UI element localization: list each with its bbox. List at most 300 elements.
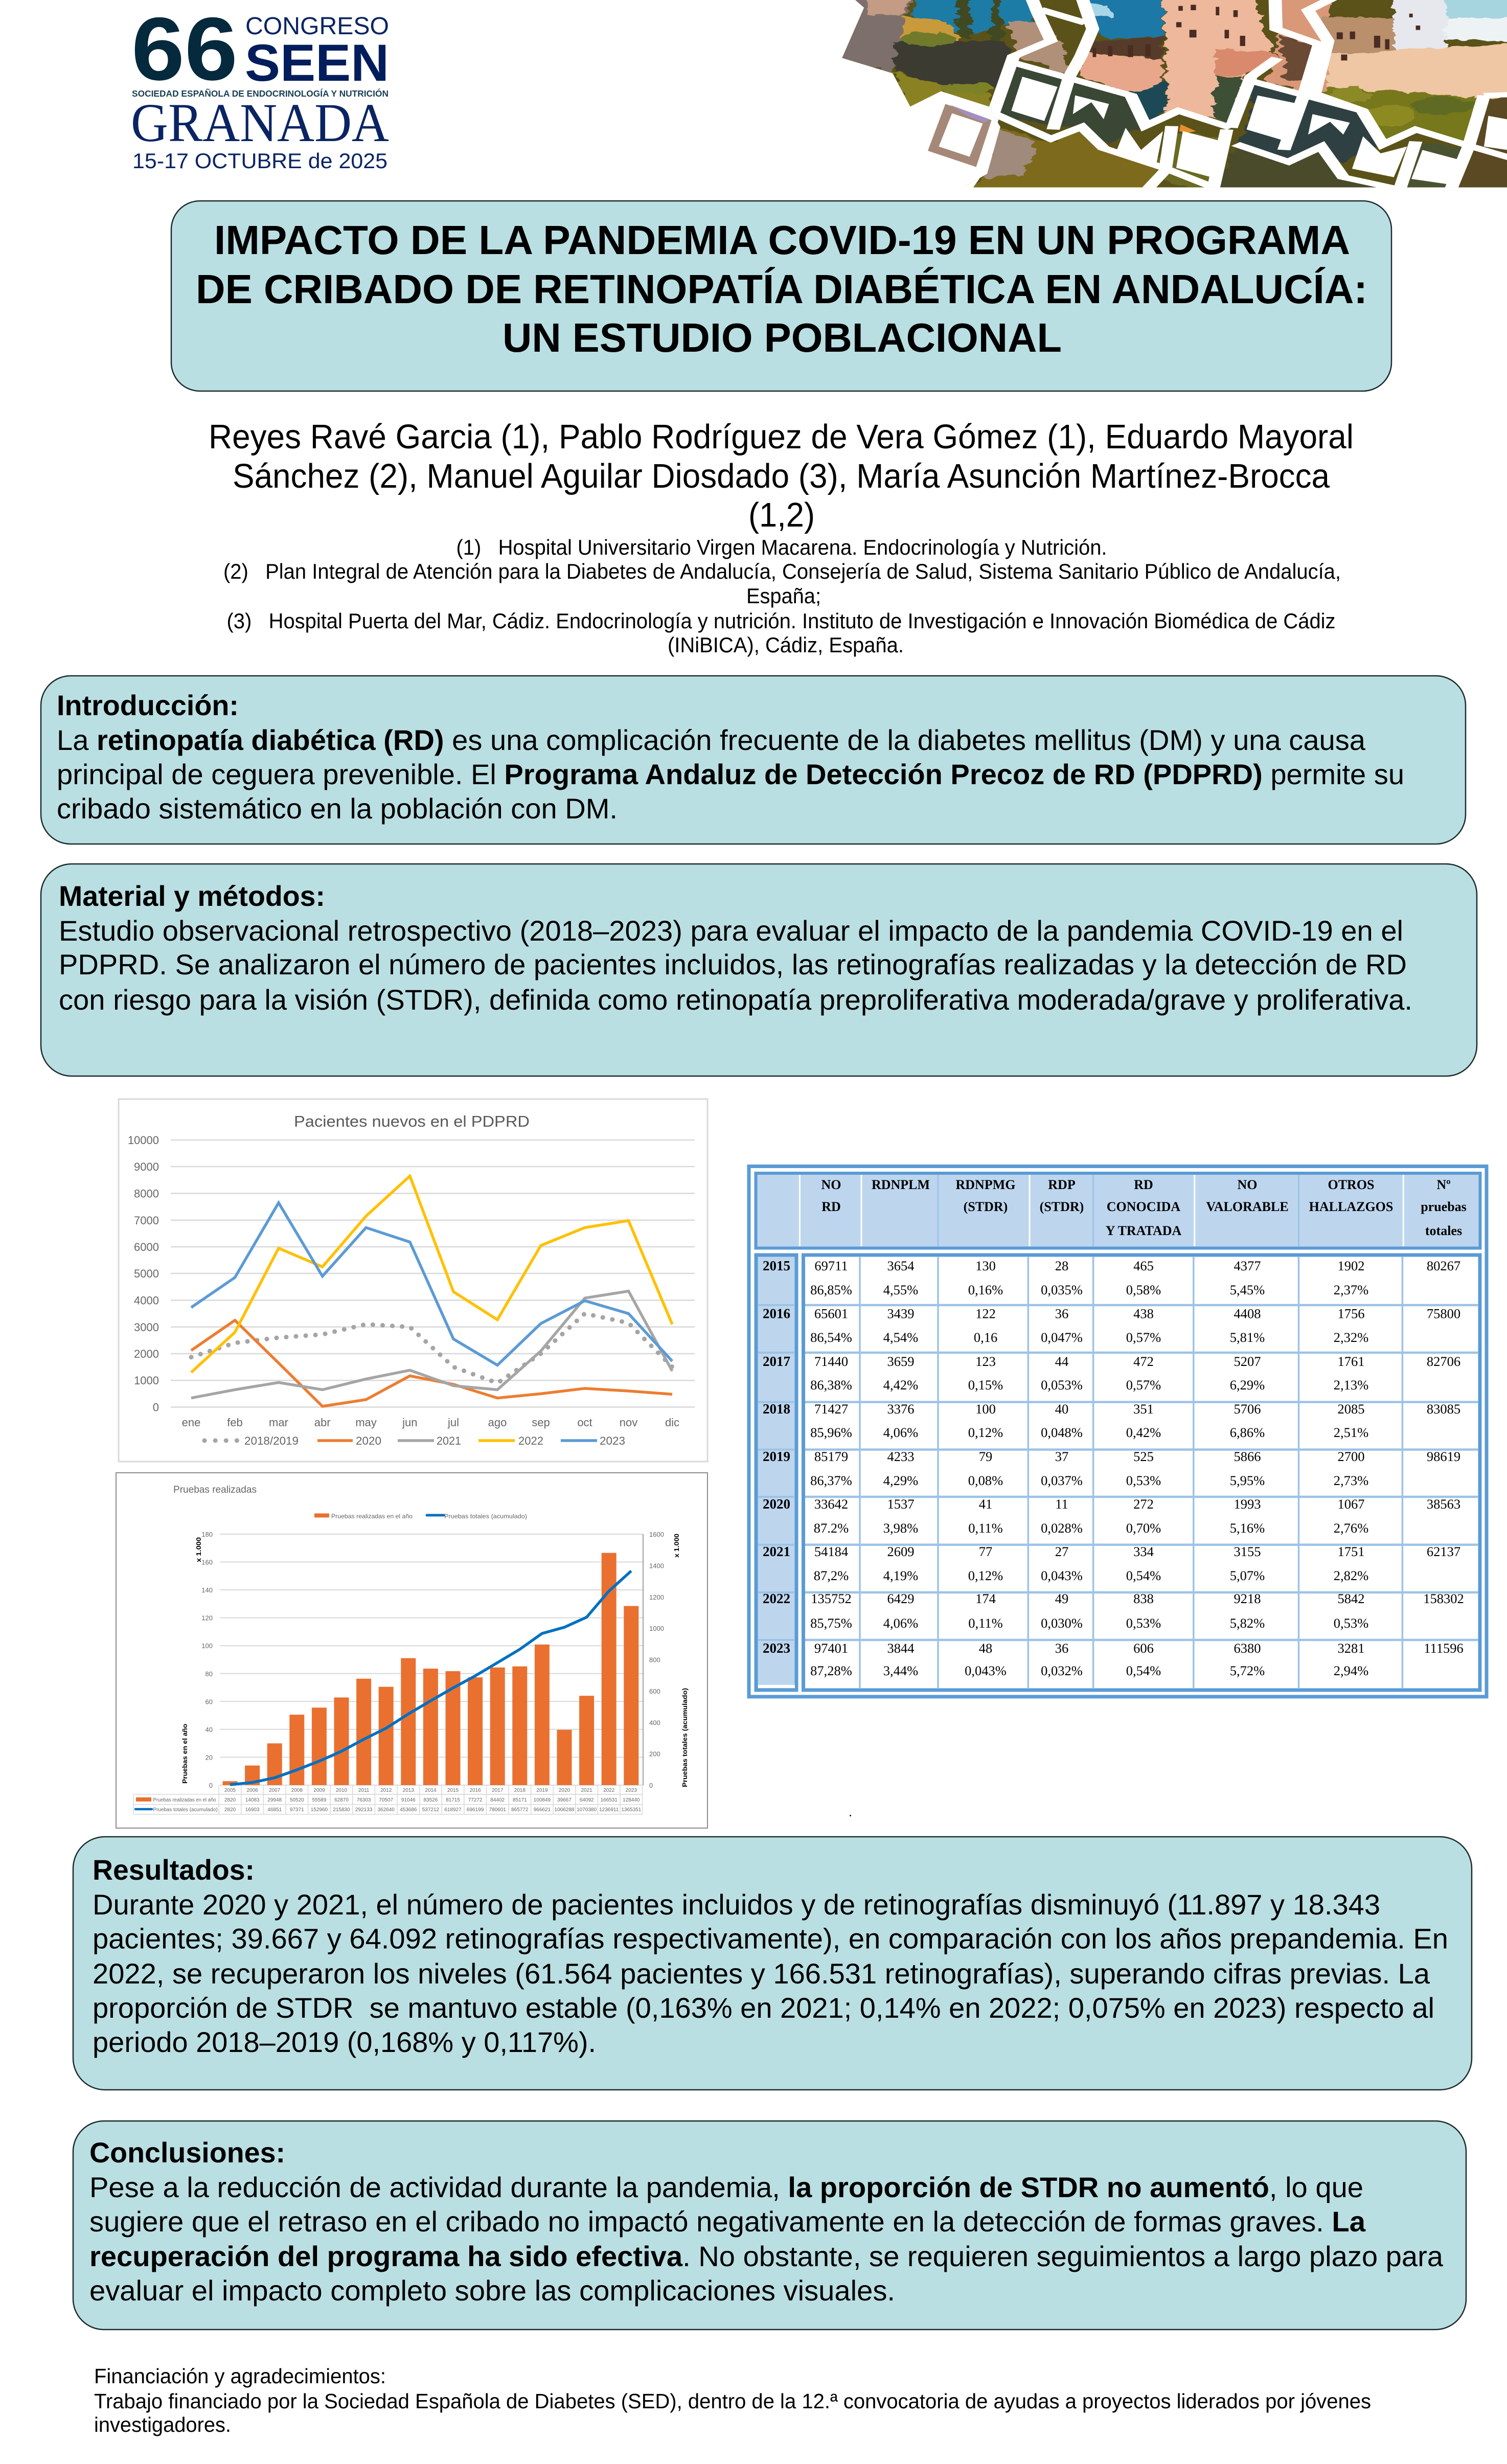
left axis labels: 60 [206,1698,213,1705]
right axis: 400 [649,1719,660,1726]
chart data table: 97371 [290,1807,304,1813]
row 2023: 2,94% [1334,1663,1368,1678]
row 2017: 71440 [814,1354,848,1369]
chart data table: 2020 [559,1788,570,1793]
table header: RDNPMG [956,1177,1015,1192]
table header: Nº [1436,1177,1451,1192]
row 2016: 65601 [814,1306,848,1321]
axis title: pruebas totales: Pruebas totales (acumulado) [681,1688,689,1787]
chart data table: 29948 [267,1797,282,1803]
row 2017: 4,42% [883,1377,918,1393]
chart data table: 865772 [511,1807,529,1813]
row 2023: 3,44% [883,1663,918,1678]
chart title: Pacientes nuevos en el PDPRD [294,1112,530,1130]
chart data table: 2014 [425,1788,437,1793]
x axis labels [182,1416,679,1429]
row 2019: 86,37% [810,1473,852,1488]
chart legend: Pruebas totales (acumulado) [444,1513,527,1520]
chart data table: 1070380 [577,1807,597,1813]
chart data table: 2007 [269,1788,281,1793]
x axis labels: ago [488,1416,507,1429]
row 2020: 38563 [1427,1496,1460,1512]
row 2021: 87,2% [814,1568,849,1583]
chart data table: 50520 [290,1797,304,1803]
table header: (STDR) [964,1199,1008,1214]
row 2022: 9218 [1234,1591,1261,1606]
row 2023: 6380 [1234,1640,1261,1656]
panel: title [171,201,1391,391]
table header: HALLAZGOS [1309,1199,1393,1214]
row 2015: 86,85% [810,1282,852,1297]
row 2017: 2,13% [1334,1377,1368,1393]
row 2017: 5207 [1234,1354,1261,1369]
row 2018: 4,06% [883,1425,918,1440]
row 2022: 158302 [1423,1591,1464,1606]
right axis: 0 [649,1782,653,1789]
text block: material y métodos body: PDPRD. Se analizaron el número de pacientes incluidos, las retinografías realizadas y la detección de RD [59,949,1407,980]
row 2021: 77 [979,1544,992,1559]
row 2018: 85,96% [810,1425,852,1440]
row 2019 [810,1449,1460,1488]
chart data table: 128440 [623,1797,640,1803]
chart data table: 2011 [358,1788,370,1793]
row 2016: 122 [975,1306,996,1321]
chart data table: 14083 [245,1797,260,1803]
row 2019: 4233 [887,1449,914,1464]
y axis labels: 3000 [134,1321,159,1334]
row 2018 [810,1401,1460,1440]
chart data table: 2017 [492,1788,504,1793]
series: 2018/2019 [191,1314,672,1383]
row 2017: 0,053% [1041,1377,1083,1393]
table: resultados del cribado por año [749,1167,1487,1697]
chart data table: 2005 [224,1788,236,1793]
table: year column: 2018 [763,1401,790,1417]
table header: pruebas [1421,1199,1467,1214]
table header: RDNPLM [872,1177,930,1192]
table header: CONOCIDA [1107,1199,1180,1214]
heading: introducción: Introducción: [57,690,239,721]
row 2018: 40 [1055,1401,1068,1417]
row 2018: 0,048% [1041,1425,1083,1440]
table: year column: 2019 [763,1449,790,1464]
chart data table: 83526 [423,1797,438,1803]
row 2019: 79 [979,1449,992,1464]
text block: resultados body: pacientes; 39.667 y 64.092 retinografías respectivamente), en comparación con los años prepandemia. En [93,1923,1448,1955]
heading: conclusiones: Conclusiones: [89,2137,285,2169]
x axis labels: may [355,1416,377,1429]
chart data table: 166531 [601,1797,618,1803]
row 2020: 2,76% [1334,1520,1368,1536]
chart data table [133,1785,643,1814]
row 2020: 0,70% [1126,1520,1161,1536]
row 2019: 85179 [814,1449,848,1464]
row 2017: 3659 [887,1354,914,1369]
cumulative line [230,1571,631,1785]
heading: poster title: DE CRIBADO DE RETINOPATÍA DIABÉTICA EN ANDALUCÍA: [196,266,1367,312]
panel: resultados [73,1837,1472,2090]
row 2019: 37 [1055,1449,1068,1464]
axis unit left: x 1.000 [195,1537,202,1562]
chart data table: 1365351 [621,1807,642,1813]
row 2020: 33642 [814,1496,848,1512]
row 2021: 0,54% [1126,1568,1161,1583]
row 2023 [810,1640,1464,1678]
table: year column: 2022 [763,1591,790,1606]
row 2016: 4,54% [883,1330,918,1345]
row 2020: 1537 [887,1496,914,1512]
chart data table: 64092 [580,1797,594,1803]
bars [223,1553,638,1785]
text block: authors: Sánchez (2), Manuel Aguilar Diosdado (3), María Asunción Martínez-Brocca [233,458,1330,495]
row 2018: 100 [975,1401,996,1417]
row 2017 [810,1354,1460,1393]
series: 2021 [191,1291,672,1398]
chart data table: 81715 [446,1797,460,1803]
row 2020: 0,028% [1041,1520,1083,1536]
text block: resultados body: periodo 2018–2019 (0,168% y 0,117%). [93,2026,596,2058]
row 2021: 27 [1055,1544,1068,1559]
row 2016: 0,16 [974,1330,997,1345]
heading: poster title [196,217,1367,360]
series: 2023 [191,1203,672,1365]
chart data table: 55589 [312,1797,327,1803]
row 2023: 111596 [1424,1640,1464,1656]
left axis labels: 20 [206,1753,213,1761]
chart legend [314,1513,527,1520]
row 2022: 5,82% [1230,1615,1265,1631]
chart data table: 2006 [246,1788,258,1793]
x axis labels: abr [314,1416,331,1429]
x axis labels: sep [532,1416,550,1429]
row 2017: 6,29% [1230,1377,1265,1393]
row 2021: 5,07% [1230,1568,1265,1583]
row 2018: 2085 [1337,1401,1365,1417]
row 2017: 82706 [1427,1354,1460,1369]
row 2019: 2700 [1337,1449,1365,1464]
chart data table: 2012 [380,1788,392,1793]
table header: (STDR) [1040,1199,1084,1214]
row 2019: 0,08% [968,1473,1003,1488]
x axis labels: nov [620,1416,637,1429]
y axis labels: 4000 [134,1294,159,1307]
row 2022: 6429 [887,1591,914,1606]
row 2015: 2,37% [1334,1282,1368,1297]
text block: material y métodos body: Estudio observacional retrospectivo (2018–2023) para evaluar el impacto de la pandemia COVID-19 en el [59,915,1403,947]
left axis labels: 180 [201,1531,213,1538]
row 2019: 4,29% [883,1473,918,1488]
chart data table: 215830 [333,1807,350,1813]
text block: introducción body [57,724,1404,825]
row 2021 [814,1544,1460,1583]
row 2021: 2609 [887,1544,914,1559]
row 2015: 0,035% [1041,1282,1083,1297]
row 2018: 83085 [1427,1401,1460,1417]
panel: conclusiones [73,2121,1466,2330]
row 2022: 174 [975,1591,996,1606]
heading: resultados: Resultados: [93,1854,255,1886]
row 2022: 0,11% [968,1615,1003,1631]
text block: affiliations: (3) Hospital Puerta del Mar, Cádiz. Endocrinología y nutrición. Instituto de Investigación e Innovación Biomédica de Cádiz [227,609,1335,633]
row 2015: 4377 [1234,1258,1261,1273]
text block: authors: (1,2) [748,496,815,534]
table header [756,1173,1480,1248]
table: year column: 2016 [763,1306,790,1321]
right axis: 800 [649,1656,660,1663]
row 2023: 5,72% [1230,1663,1265,1678]
row 2017: 44 [1055,1354,1068,1369]
row 2020: 272 [1133,1496,1154,1512]
row 2021: 1751 [1337,1544,1365,1559]
row 2023: 3281 [1337,1640,1365,1656]
y axis labels: 0 [153,1401,159,1414]
heading: poster title: UN ESTUDIO POBLACIONAL [503,315,1062,360]
right axis: 1000 [649,1625,664,1632]
table header: RDP [1048,1177,1076,1192]
row 2021: 0,12% [968,1568,1003,1583]
heading: material y métodos: Material y métodos: [59,880,325,912]
row 2022: 838 [1133,1591,1154,1606]
text block: financiación y agradecimientos: investigadores. [94,2413,231,2436]
row 2016: 3439 [887,1306,914,1321]
row 2022: 5842 [1337,1591,1365,1606]
chart data table: 39667 [557,1797,572,1803]
row 2023: 0,032% [1041,1663,1083,1678]
row 2017: 0,15% [968,1377,1003,1393]
chart data table: Pruebas totales (acumulado) [153,1807,218,1813]
row 2016 [810,1306,1460,1345]
table: year column: 2017 [763,1354,790,1369]
table: year column: 2021 [763,1544,790,1559]
left axis labels: 40 [206,1726,213,1733]
chart data table: 85171 [513,1797,527,1803]
right axis: 1400 [649,1562,664,1569]
row 2020: 5,16% [1230,1520,1265,1536]
chart data table: 362640 [378,1807,395,1813]
text block: conclusiones body: sugiere que el retraso en el cribado no impactó negativamente en la detección de formas graves. La [89,2206,1366,2238]
right axis: 1600 [649,1531,664,1538]
legend: 2023 [600,1434,625,1447]
row 2023: 3844 [887,1640,914,1656]
row 2015: 1902 [1337,1258,1365,1273]
text block: resultados body: Durante 2020 y 2021, el número de pacientes incluidos y de retinografías disminuyó (11.897 y 18.343 [93,1889,1380,1921]
row 2018: 6,86% [1230,1425,1265,1440]
text block: financiación y agradecimientos: Trabajo financiado por la Sociedad Española de Diabetes (SED), dentro de la 12.ª convocatoria de ayudas a proyectos liderados por jóvenes [94,2389,1371,2413]
legend: 2022 [518,1434,543,1447]
text block: introducción body: principal de ceguera prevenible. El Programa Andaluz de Detección Precoz de RD (PDPRD) permite su [57,759,1404,790]
row 2018: 0,42% [1126,1425,1161,1440]
chart data table: 152960 [311,1807,328,1813]
row 2018: 5706 [1234,1401,1261,1417]
row 2020: 0,11% [968,1520,1003,1536]
right axis: 600 [649,1687,660,1695]
row 2022: 0,53% [1126,1615,1161,1631]
text block: introducción body: cribado sistemático en la población con DM. [57,793,618,825]
row 2019: 0,037% [1041,1473,1083,1488]
table header: OTROS [1328,1177,1375,1192]
text block: material y métodos body [59,915,1412,1016]
row 2020: 11 [1055,1496,1068,1512]
left axis labels: 100 [201,1642,213,1650]
chart data table: 966621 [534,1807,551,1813]
row 2023: 606 [1133,1640,1154,1656]
panel: introducción [41,676,1466,844]
row 2018: 351 [1133,1401,1154,1417]
row 2019: 5866 [1234,1449,1261,1464]
chart data table: 62870 [334,1797,349,1803]
chart data table: 2820 [224,1797,236,1803]
row 2023: 36 [1055,1640,1068,1656]
text block: authors: Reyes Ravé Garcia (1), Pablo Rodríguez de Vera Gómez (1), Eduardo Mayoral [209,418,1354,456]
chart data table: 2019 [536,1788,548,1793]
legend: 2021 [437,1434,461,1447]
row 2016: 86,54% [810,1330,852,1345]
chart data table: 2009 [313,1788,325,1793]
text block: resultados body [93,1889,1448,2058]
chart data table: 2013 [403,1788,414,1793]
row 2022: 0,53% [1334,1615,1368,1631]
x axis labels: dic [665,1416,679,1429]
row 2019: 98619 [1427,1449,1460,1464]
chart data table: 2022 [603,1788,615,1793]
legend: 2018/2019 [244,1434,299,1447]
row 2016: 75800 [1427,1306,1460,1321]
table header: NO [821,1177,841,1192]
text block: conclusiones body: evaluar el impacto completo sobre las complicaciones visuales. [89,2275,895,2307]
y axis labels: 9000 [134,1160,159,1173]
text block: affiliations: (2) Plan Integral de Atención para la Diabetes de Andalucía, Consejería de Salud, Sistema Sanitario Público de Andalucía, [223,559,1341,583]
chart data table: 1006288 [555,1807,575,1813]
row 2018: 2,51% [1334,1425,1368,1440]
row 2023: 87,28% [810,1663,852,1678]
row 2017: 1761 [1337,1354,1365,1369]
table header: Y TRATADA [1106,1223,1181,1238]
row 2020: 41 [979,1496,992,1512]
chart data table: 618927 [444,1807,462,1813]
chart data table: 100849 [534,1797,551,1803]
text block: conclusiones body: recuperación del programa ha sido efectiva . No obstante, se requieren seguimientos a largo plazo para [89,2241,1443,2272]
row 2017: 123 [975,1354,996,1369]
x axis labels: ene [182,1416,200,1429]
text block: material y métodos body: con riesgo para la visión (STDR), definida como retinopatía preproliferativa moderada/grave y proliferativa. [59,984,1412,1016]
row 2018: 71427 [814,1401,848,1417]
row 2015: 130 [975,1258,996,1273]
x axis labels: mar [269,1416,288,1429]
row 2022: 135752 [811,1591,852,1606]
row 2019: 0,53% [1126,1473,1161,1488]
row 2021: 4,19% [883,1568,918,1583]
chart data table: 46851 [267,1807,282,1813]
row 2022: 4,06% [883,1615,918,1631]
panel: material y métodos [41,864,1477,1076]
chart data table: 70507 [379,1797,394,1803]
row 2021: 54184 [814,1544,848,1559]
text block: resultados body: 2022, se recuperaron los niveles (61.564 pacientes y 166.531 retinografías), superando cifras previas. La [93,1958,1430,1990]
row 2018: 3376 [887,1401,914,1417]
table: year column: 2020 [763,1496,790,1512]
row 2016: 1756 [1337,1306,1365,1321]
header image: Alhambra mosaic [818,0,1507,193]
row 2015: 69711 [814,1258,848,1273]
chart data table: 453686 [400,1807,417,1813]
logo: 66 Congreso SEEN Granada: 15-17 OCTUBRE de 2025 [132,149,387,173]
row 2017: 0,57% [1126,1377,1161,1393]
y axis labels: 10000 [128,1134,159,1147]
heading: poster title: IMPACTO DE LA PANDEMIA COVID-19 EN UN PROGRAMA [214,217,1350,263]
chart legend: Pruebas realizadas en el año [331,1513,413,1520]
left axis labels: 0 [209,1782,213,1789]
text block: affiliations: (1) Hospital Universitario Virgen Macarena. Endocrinología y Nutrición. [456,535,1107,559]
chart data table: 2023 [626,1788,637,1793]
row 2016: 5,81% [1230,1330,1265,1345]
y axis labels: 6000 [134,1241,159,1253]
left axis labels: 80 [206,1670,213,1678]
row 2019: 525 [1133,1449,1154,1464]
table header: VALORABLE [1206,1199,1289,1214]
row 2015: 5,45% [1230,1282,1265,1297]
text block: financiación y agradecimientos [94,2364,1371,2436]
chart data table: 292133 [355,1807,373,1813]
chart data table: 91046 [401,1797,416,1803]
text block: affiliations: (INiBICA), Cádiz, España. [668,633,904,657]
table header: NO [1237,1177,1258,1192]
row 2016: 0,047% [1041,1330,1083,1345]
x axis labels: feb [227,1416,243,1429]
row 2023: 0,043% [965,1663,1007,1678]
bar chart: Pruebas realizadas [116,1473,707,1828]
line chart: Pacientes nuevos en el PDPRD [119,1099,707,1462]
chart data table: 76303 [357,1797,371,1803]
logo: 66 Congreso SEEN Granada: CONGRESO [245,13,389,40]
chart data table: 2015 [447,1788,459,1793]
y axis labels [128,1134,159,1414]
text block: authors [209,418,1354,534]
legend [204,1434,625,1447]
chart data table: 2008 [291,1788,303,1793]
row 2020: 1067 [1337,1496,1365,1512]
axis title: pruebas en el año: Pruebas en el año [181,1724,189,1784]
row 2021: 334 [1133,1544,1154,1559]
series: 2020 [191,1320,672,1406]
chart data table: 2820 [224,1807,236,1813]
chart data table: 1236911 [599,1807,619,1813]
row 2023: 97401 [814,1640,848,1656]
row 2022: 49 [1055,1591,1068,1606]
table header: RD [821,1199,841,1214]
table: year column [756,1255,796,1690]
logo: 66 Congreso SEEN Granada: SEEN [245,34,389,92]
text block: affiliations: España; [746,584,821,608]
row 2020: 3,98% [883,1520,918,1536]
x axis labels: jul [447,1416,459,1429]
chart data table: 537212 [422,1807,440,1813]
row 2021: 3155 [1234,1544,1261,1559]
row 2015: 80267 [1427,1258,1460,1273]
y axis labels: 7000 [134,1214,159,1227]
row 2016: 0,57% [1126,1330,1161,1345]
row 2022 [810,1591,1464,1631]
y axis labels: 1000 [134,1374,159,1387]
right axis: 200 [649,1750,660,1758]
chart data table: 2018 [514,1788,526,1793]
left axis labels: 120 [201,1614,213,1622]
row 2019: 5,95% [1230,1473,1265,1488]
table: year column: 2023 [763,1640,790,1656]
row 2015: 465 [1133,1258,1154,1273]
text block: conclusiones body [89,2172,1443,2307]
chart data table: 84402 [490,1797,505,1803]
table header: RD [1134,1177,1153,1192]
